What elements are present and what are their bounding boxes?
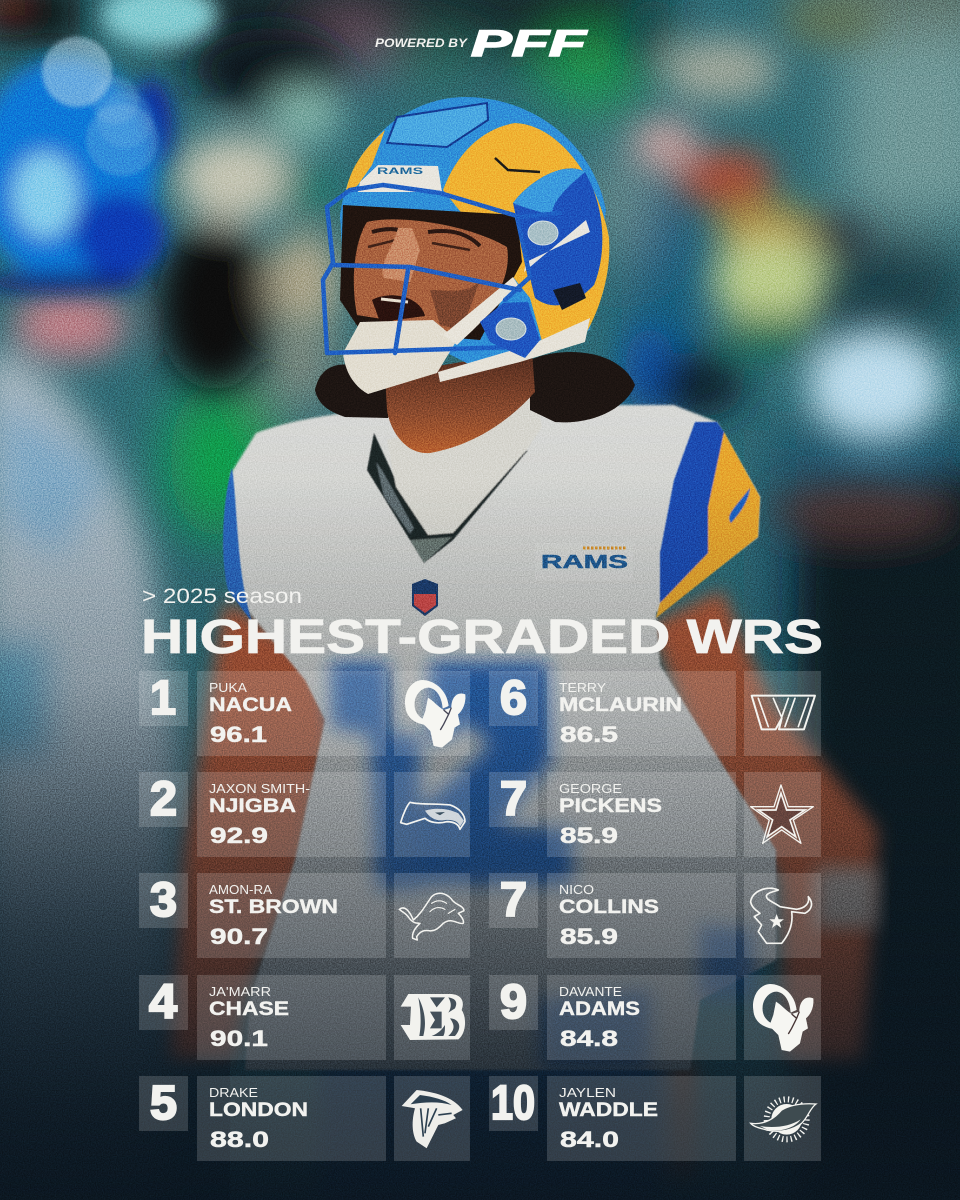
icon: Seahawks logo (401, 802, 465, 829)
row: rank 1 Puka Nacua (139, 671, 470, 756)
row: rank 9 Davante Adams: 84.8 (560, 1026, 618, 1051)
left sleeve stripe (223, 468, 252, 622)
row: rank 7 George Pickens: PICKENS (559, 796, 662, 817)
row: rank 2 Jaxon Smith-Njigba: 2 (150, 773, 177, 826)
row: rank 7 George Pickens: 85.9 (560, 823, 618, 848)
row: rank 9 Davante Adams: ADAMS (559, 999, 640, 1020)
Rams chest patch (535, 543, 633, 581)
row: rank 5 Drake London: 88.0 (210, 1127, 269, 1152)
powered by PFF logo (375, 23, 588, 64)
row: rank 10 Jaylen Waddle: JAYLEN (559, 1086, 616, 1100)
row: rank 3 Amon-Ra St. Brown: AMON-RA (209, 883, 273, 897)
row: rank 2 Jaxon Smith-Njigba: JAXON SMITH- (209, 782, 310, 796)
row: rank 7 Nico Collins: NICO (559, 883, 594, 897)
row: rank 3 Amon-Ra St. Brown: 3 (150, 874, 177, 927)
row: rank 5 Drake London (139, 1076, 470, 1161)
wrist band (815, 868, 877, 928)
row: rank 10 Jaylen Waddle: 84.0 (560, 1127, 619, 1152)
bokeh circles (42, 37, 158, 176)
row: rank 2 Jaxon Smith-Njigba: 92.9 (210, 823, 268, 848)
icon: Commanders logo (752, 696, 815, 729)
row: rank 7 George Pickens: 7 (500, 773, 527, 826)
row: rank 3 Amon-Ra St. Brown (139, 873, 470, 958)
season label: > 2025 season (142, 585, 302, 608)
helmet: RAMS (377, 166, 423, 177)
row: rank 4 Ja'Marr Chase: 90.1 (210, 1026, 268, 1051)
row: rank 9 Davante Adams (489, 975, 821, 1060)
row: rank 7 Nico Collins: COLLINS (559, 897, 659, 918)
row: rank 2 Jaxon Smith-Njigba (139, 772, 470, 857)
row: rank 3 Amon-Ra St. Brown: 90.7 (210, 924, 268, 949)
row: rank 10 Jaylen Waddle: WADDLE (559, 1100, 658, 1121)
title: HIGHEST-GRADED WRS (141, 611, 823, 664)
powered by PFF logo: POWERED BY (375, 36, 468, 50)
row: rank 7 Nico Collins (489, 873, 821, 958)
icon: Rams logo (405, 680, 465, 748)
row: rank 6 Terry McLaurin: TERRY (559, 681, 607, 695)
icon: Falcons logo (402, 1090, 463, 1148)
row: rank 6 Terry McLaurin: 86.5 (560, 722, 618, 747)
icon: Lions logo (399, 893, 464, 940)
row: rank 1 Puka Nacua: 1 (150, 672, 176, 725)
row: rank 5 Drake London: 5 (150, 1077, 177, 1130)
facemask (323, 185, 560, 353)
row: rank 2 Jaxon Smith-Njigba: NJIGBA (209, 796, 296, 817)
NFL shield (412, 579, 438, 616)
row: rank 5 Drake London: LONDON (209, 1100, 308, 1121)
lower body, out of focus (170, 590, 878, 1200)
jersey numerals, out of focus (330, 662, 755, 1070)
helmet (323, 97, 609, 394)
blurred blue helmet, left (0, 0, 218, 292)
V neck insert and undershirt (367, 390, 542, 563)
icon: Bengals logo (401, 994, 465, 1040)
row: rank 7 Nico Collins: 85.9 (560, 924, 618, 949)
powered by PFF logo: PFF (471, 23, 588, 64)
row: rank 1 Puka Nacua: NACUA (209, 695, 292, 716)
row: rank 3 Amon-Ra St. Brown: ST. BROWN (209, 897, 338, 918)
icon: Rams logo (753, 984, 813, 1052)
neck and hair (315, 350, 635, 453)
row: rank 4 Ja'Marr Chase: JA'MARR (209, 985, 271, 999)
row: rank 10 Jaylen Waddle: 10 (491, 1077, 535, 1130)
Rams chest patch: RAMS (541, 552, 628, 572)
icon: Dolphins logo (751, 1099, 816, 1139)
row: rank 7 George Pickens (489, 772, 821, 857)
right sleeve (656, 422, 760, 618)
row: rank 6 Terry McLaurin: MCLAURIN (559, 695, 682, 716)
row: rank 4 Ja'Marr Chase: CHASE (209, 999, 289, 1020)
jersey (224, 395, 776, 1070)
row: rank 4 Ja'Marr Chase (139, 975, 470, 1060)
row: rank 4 Ja'Marr Chase: 4 (149, 976, 177, 1029)
row: rank 5 Drake London: DRAKE (209, 1086, 258, 1100)
icon: Cowboys logo (751, 785, 813, 843)
row: rank 6 Terry McLaurin: 6 (500, 672, 527, 725)
row: rank 1 Puka Nacua: 96.1 (210, 722, 267, 747)
row: rank 9 Davante Adams: 9 (500, 976, 527, 1029)
row: rank 7 Nico Collins: 7 (500, 874, 527, 927)
bottom darkening overlay (0, 480, 960, 1200)
row: rank 10 Jaylen Waddle (489, 1076, 821, 1161)
player photo (170, 97, 878, 1200)
row: rank 6 Terry McLaurin (489, 671, 821, 756)
icon: Texans logo (751, 888, 811, 943)
row: rank 9 Davante Adams: DAVANTE (559, 985, 622, 999)
row: rank 1 Puka Nacua: PUKA (209, 681, 248, 695)
row: rank 7 George Pickens: GEORGE (559, 782, 622, 796)
